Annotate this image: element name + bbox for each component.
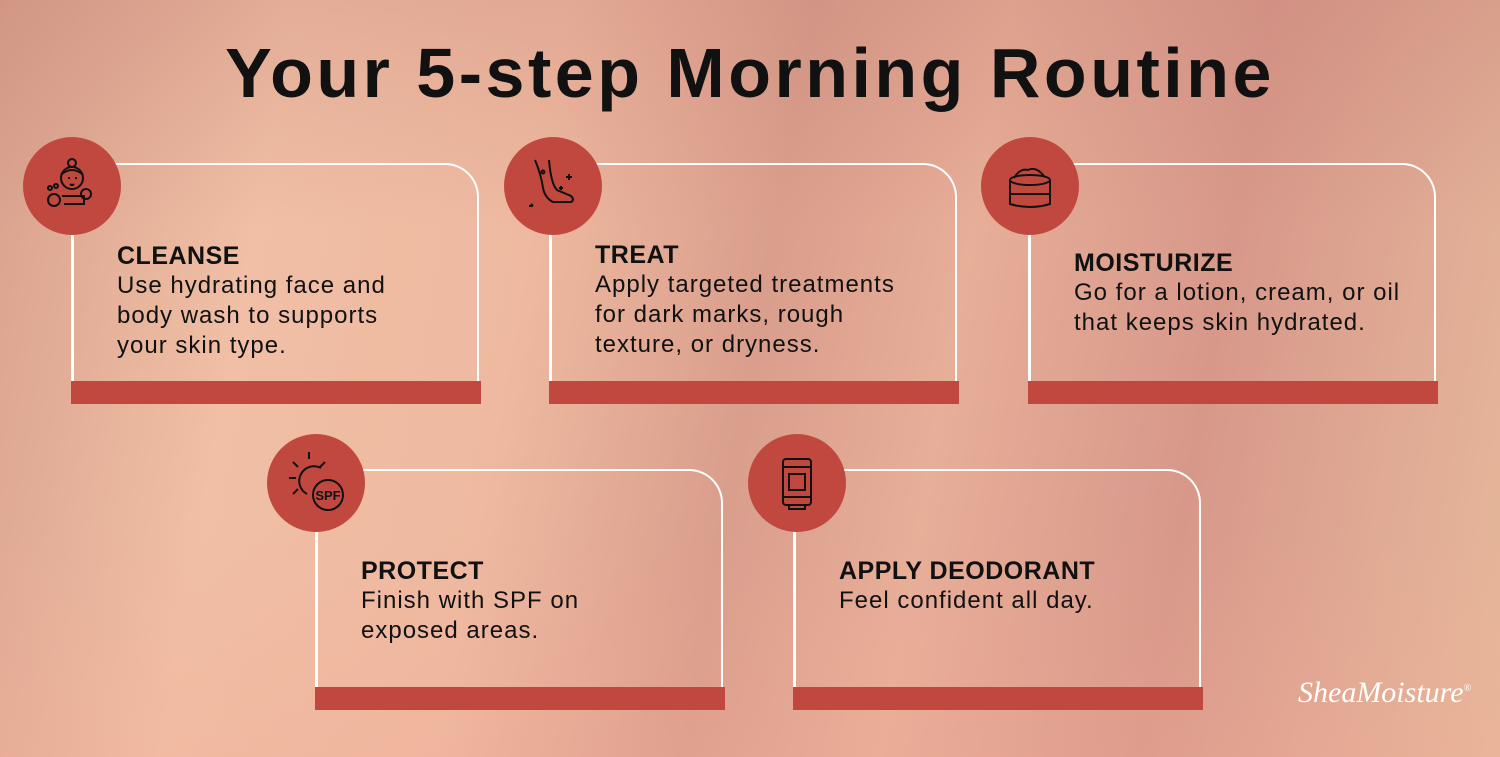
text: protect: Finish with SPF on [361, 587, 579, 614]
text: moisturize: MOISTURIZE [1074, 249, 1233, 277]
text: cleanse: CLEANSE [117, 242, 240, 270]
text: moisturize: Go for a lotion, cream, or oil [1074, 279, 1400, 306]
icon: sun spf: SPF [315, 488, 341, 503]
text: deodorant: APPLY DEODORANT [839, 557, 1095, 585]
text: cleanse [117, 242, 386, 359]
title: Your 5-step Morning Routine [225, 34, 1275, 112]
text: cleanse: body wash to supports [117, 302, 378, 329]
text: cleanse: Use hydrating face and [117, 272, 386, 299]
text: moisturize [1074, 249, 1400, 336]
text: protect [361, 557, 579, 644]
logo: SheaMoisture® [1298, 676, 1471, 709]
icon: sun spf [267, 434, 365, 532]
icon: cleanse face [23, 137, 121, 235]
text: treat: for dark marks, rough [595, 301, 844, 328]
panel: deodorant [793, 469, 1203, 710]
text: protect: PROTECT [361, 557, 484, 585]
text: treat: Apply targeted treatments [595, 271, 895, 298]
text: moisturize: that keeps skin hydrated. [1074, 309, 1366, 336]
text: treat: texture, or dryness. [595, 331, 820, 358]
text: protect: exposed areas. [361, 617, 539, 644]
text: deodorant: Feel confident all day. [839, 587, 1094, 614]
text: treat: TREAT [595, 241, 679, 269]
icon: foot [504, 137, 602, 235]
icon: jar [981, 137, 1079, 235]
panel: protect [315, 469, 725, 710]
panel: moisturize [1028, 163, 1438, 404]
panel: treat [549, 163, 959, 404]
text: deodorant [839, 557, 1095, 614]
panel: cleanse [71, 163, 481, 404]
icon: deodorant [748, 434, 846, 532]
text: cleanse: your skin type. [117, 332, 287, 359]
text: treat [595, 241, 895, 358]
